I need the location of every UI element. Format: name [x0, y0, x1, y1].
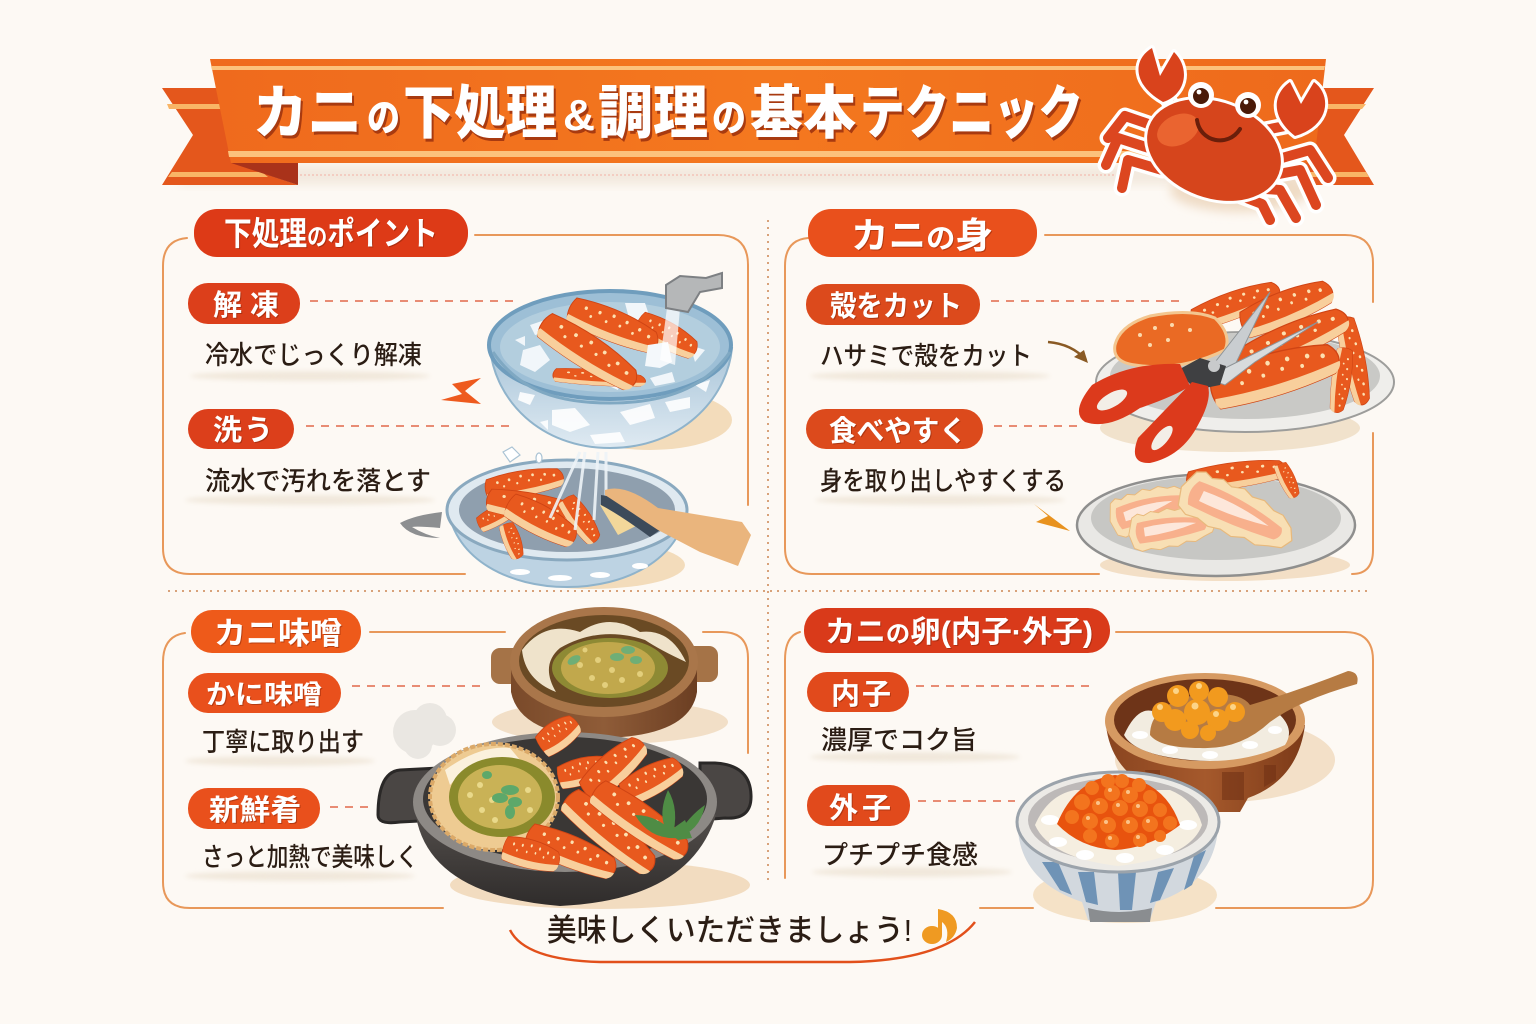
- miso grain: [577, 648, 643, 688]
- title text: の: [367, 98, 400, 140]
- illustration: clay pot with miso: [491, 607, 728, 744]
- text: wash: 流水で汚れを落とす: [205, 466, 431, 496]
- crab legs in bowl: [632, 309, 702, 363]
- heading: [808, 209, 1037, 257]
- label: crab miso: [188, 673, 341, 713]
- dotted vertical divider: [767, 220, 769, 885]
- leader line: [918, 800, 1015, 802]
- label: thaw: 解凍: [213, 289, 279, 322]
- text: inner roe: 濃厚でコク旨: [821, 725, 977, 755]
- dotted horizontal divider: [168, 590, 1372, 592]
- title text: カニ: [253, 81, 362, 146]
- leader line: [991, 300, 1180, 302]
- droplets: [503, 447, 542, 463]
- water: [500, 302, 720, 392]
- blades: [1205, 292, 1270, 375]
- closing text: 美味しくいただきましょう!: [547, 913, 912, 948]
- title text: 基本: [750, 81, 856, 146]
- label: cut shell: 殻をカット: [830, 290, 962, 323]
- text: outer roe: [812, 840, 1012, 877]
- label: outer roe: [807, 785, 910, 826]
- roe highlights: [1157, 683, 1236, 717]
- shell interior: [522, 622, 686, 692]
- text: remove carefully: 丁寧に取り出す: [202, 727, 364, 757]
- rice grains: [1041, 815, 1197, 863]
- underline swoosh: [510, 922, 975, 962]
- bowl rim: [447, 460, 687, 560]
- plate shadow: [1100, 404, 1360, 452]
- pot body: [511, 665, 697, 738]
- crab claws: [1138, 48, 1325, 136]
- pot rim: [510, 607, 698, 717]
- title text: テクニック: [860, 81, 1083, 146]
- title text: 下処理: [403, 81, 557, 146]
- bowl rim: [489, 291, 731, 399]
- text: quick heating: [185, 842, 418, 881]
- rice grains: [1132, 726, 1282, 759]
- leader line: [352, 685, 480, 687]
- handle 1: [1079, 364, 1190, 424]
- illustration: plate of legs with scissors: [1079, 274, 1394, 463]
- garnish: [635, 790, 705, 840]
- panel: pre-treatment: [163, 209, 751, 589]
- ribbon right tail: [1300, 88, 1374, 185]
- ribbon shadow: [180, 165, 1310, 185]
- text: easy to eat: [815, 466, 1066, 505]
- dotted seam: [300, 174, 1115, 176]
- heading: [804, 608, 1110, 653]
- heading: カニの身: [851, 215, 993, 256]
- handle 2: [1135, 382, 1209, 463]
- crab highlights: [1152, 107, 1204, 153]
- rice: [1035, 790, 1202, 866]
- bowl pattern: [510, 563, 648, 581]
- rice: [1124, 710, 1289, 761]
- crab smile: [1197, 120, 1240, 140]
- leader line: [994, 425, 1078, 427]
- front rim highlight: [493, 352, 730, 403]
- text: outer roe: プチプチ食感: [822, 840, 978, 870]
- arrow: to plate: [1034, 504, 1070, 531]
- text: easy to eat: 身を取り出しやすくする: [820, 466, 1066, 496]
- heading: 下処理のポイント: [224, 215, 438, 252]
- blue stripes: [1042, 850, 1206, 910]
- swoosh: [400, 512, 442, 538]
- label: crab miso: かに味噌: [206, 680, 322, 710]
- label: fresh: 新鮮肴: [209, 794, 301, 827]
- bowl shadow: [1033, 867, 1217, 923]
- crab pieces front row: [557, 784, 663, 881]
- bowl foot: [1088, 908, 1152, 922]
- pot shadow: [492, 700, 728, 744]
- herbs in shell: [482, 771, 522, 819]
- faucet: [666, 273, 722, 312]
- label: cut shell: [806, 284, 980, 325]
- text: inner roe: [810, 725, 1020, 762]
- crab legs: [1106, 95, 1328, 220]
- label: easy to eat: [806, 409, 983, 449]
- ice in bowl body: [518, 380, 710, 444]
- illustration: steam: [393, 703, 456, 759]
- outer roe: [1057, 775, 1180, 850]
- illustration: wooden bowl with inner roe: [1105, 671, 1358, 812]
- large ice cube: [645, 342, 672, 368]
- panel frame: [785, 632, 1373, 908]
- pivot: [1178, 358, 1226, 390]
- label: wash: 洗う: [213, 414, 273, 447]
- heading: [191, 610, 361, 653]
- label: wash: [188, 409, 294, 449]
- inner roe: [1152, 681, 1245, 741]
- pan body: [415, 810, 716, 906]
- illustration: striped bowl with outer roe: [1017, 772, 1219, 923]
- bowl body: [1018, 830, 1218, 920]
- bowl shadow: [568, 390, 732, 450]
- bowl rim: [1105, 673, 1305, 769]
- pan shadow: [450, 861, 750, 909]
- heading: [194, 209, 468, 257]
- ice: [515, 303, 705, 390]
- text: thaw: 冷水でじっくり解凍: [205, 340, 422, 370]
- plate: [1077, 474, 1355, 576]
- panel frame: [163, 632, 748, 908]
- bowl shadow: [495, 541, 685, 589]
- bowl shadow: [1115, 718, 1335, 802]
- ribbon left tail: [162, 88, 298, 185]
- miso in shell: [449, 757, 555, 837]
- plate: [1096, 332, 1394, 432]
- label: easy to eat: 食べやすく: [829, 415, 967, 448]
- herbs: [566, 646, 642, 667]
- bowl body: [1106, 725, 1305, 812]
- text: quick heating: さっと加熱で美味しく: [202, 842, 418, 872]
- crab legs outline: [1106, 95, 1328, 220]
- bowl interior: [459, 468, 675, 552]
- crab legs on plate: [1334, 315, 1374, 407]
- scissors: [1079, 292, 1318, 463]
- title text: の: [712, 98, 746, 140]
- text: thaw: [190, 340, 430, 381]
- brush: [600, 488, 751, 566]
- leader line: [330, 806, 368, 808]
- crab claw body: [1115, 312, 1227, 367]
- label: thaw: [188, 283, 300, 324]
- title banner: [162, 59, 1374, 185]
- crab leg behind: [1185, 455, 1288, 494]
- panel: crab miso: [163, 607, 751, 909]
- heading: カニ味噌: [214, 616, 342, 651]
- title text: &: [563, 91, 595, 140]
- text: cut shell: ハサミで殻をカット: [820, 341, 1032, 371]
- icon: music note: [922, 909, 957, 944]
- arrow: to scissors: [1048, 342, 1088, 363]
- icon: crab mascot: [1106, 48, 1328, 220]
- miso: [552, 638, 668, 698]
- leader line: [306, 425, 510, 427]
- leader line: [310, 300, 520, 302]
- plate shadow: [1100, 549, 1350, 581]
- illustration: plate of shelled meat: [1077, 455, 1355, 581]
- illustration: washing bowl with brush: [400, 447, 751, 589]
- illustration: glass bowl with ice water: [489, 273, 732, 450]
- crab body: [1133, 81, 1295, 219]
- crab pieces back row: [532, 710, 585, 759]
- title text: 調理: [598, 81, 708, 146]
- closing message: [510, 909, 975, 962]
- crab eyes: [1188, 82, 1261, 118]
- panel frame: [785, 235, 1373, 574]
- miso grain: [467, 782, 533, 823]
- panel: crab meat: [785, 209, 1394, 581]
- label: fresh: [188, 788, 320, 829]
- heading: カニの卵(内子·外子): [825, 616, 1093, 649]
- panel frame: [163, 235, 748, 574]
- bowl rim: [1017, 772, 1219, 872]
- bowl stripes: [1145, 765, 1276, 800]
- icon: lightning: [441, 378, 481, 404]
- claw speckles: [1138, 323, 1192, 347]
- water streaks: [550, 452, 606, 530]
- roe highlights: [1086, 788, 1150, 840]
- label: inner roe: [807, 672, 909, 712]
- text: remove carefully: [185, 727, 375, 766]
- panel: crab roe: [785, 608, 1373, 923]
- label: inner roe: 内子: [831, 678, 891, 711]
- pan rim: [413, 732, 717, 872]
- bowl body: [490, 348, 732, 448]
- crab shadow: [1170, 168, 1310, 212]
- pan handles: [378, 768, 440, 823]
- pot handles: [491, 648, 527, 684]
- shell: [430, 744, 558, 850]
- crab legs in bowl: [483, 464, 565, 502]
- illustration: iron pan with crab: [378, 710, 751, 909]
- ribbon main band: [210, 59, 1326, 163]
- leader line: [916, 685, 1095, 687]
- label: outer roe: 外子: [829, 792, 891, 825]
- meat pieces: [1104, 477, 1197, 541]
- bowl body: [448, 508, 687, 587]
- water stream: [660, 308, 680, 365]
- spoon: [1150, 671, 1358, 748]
